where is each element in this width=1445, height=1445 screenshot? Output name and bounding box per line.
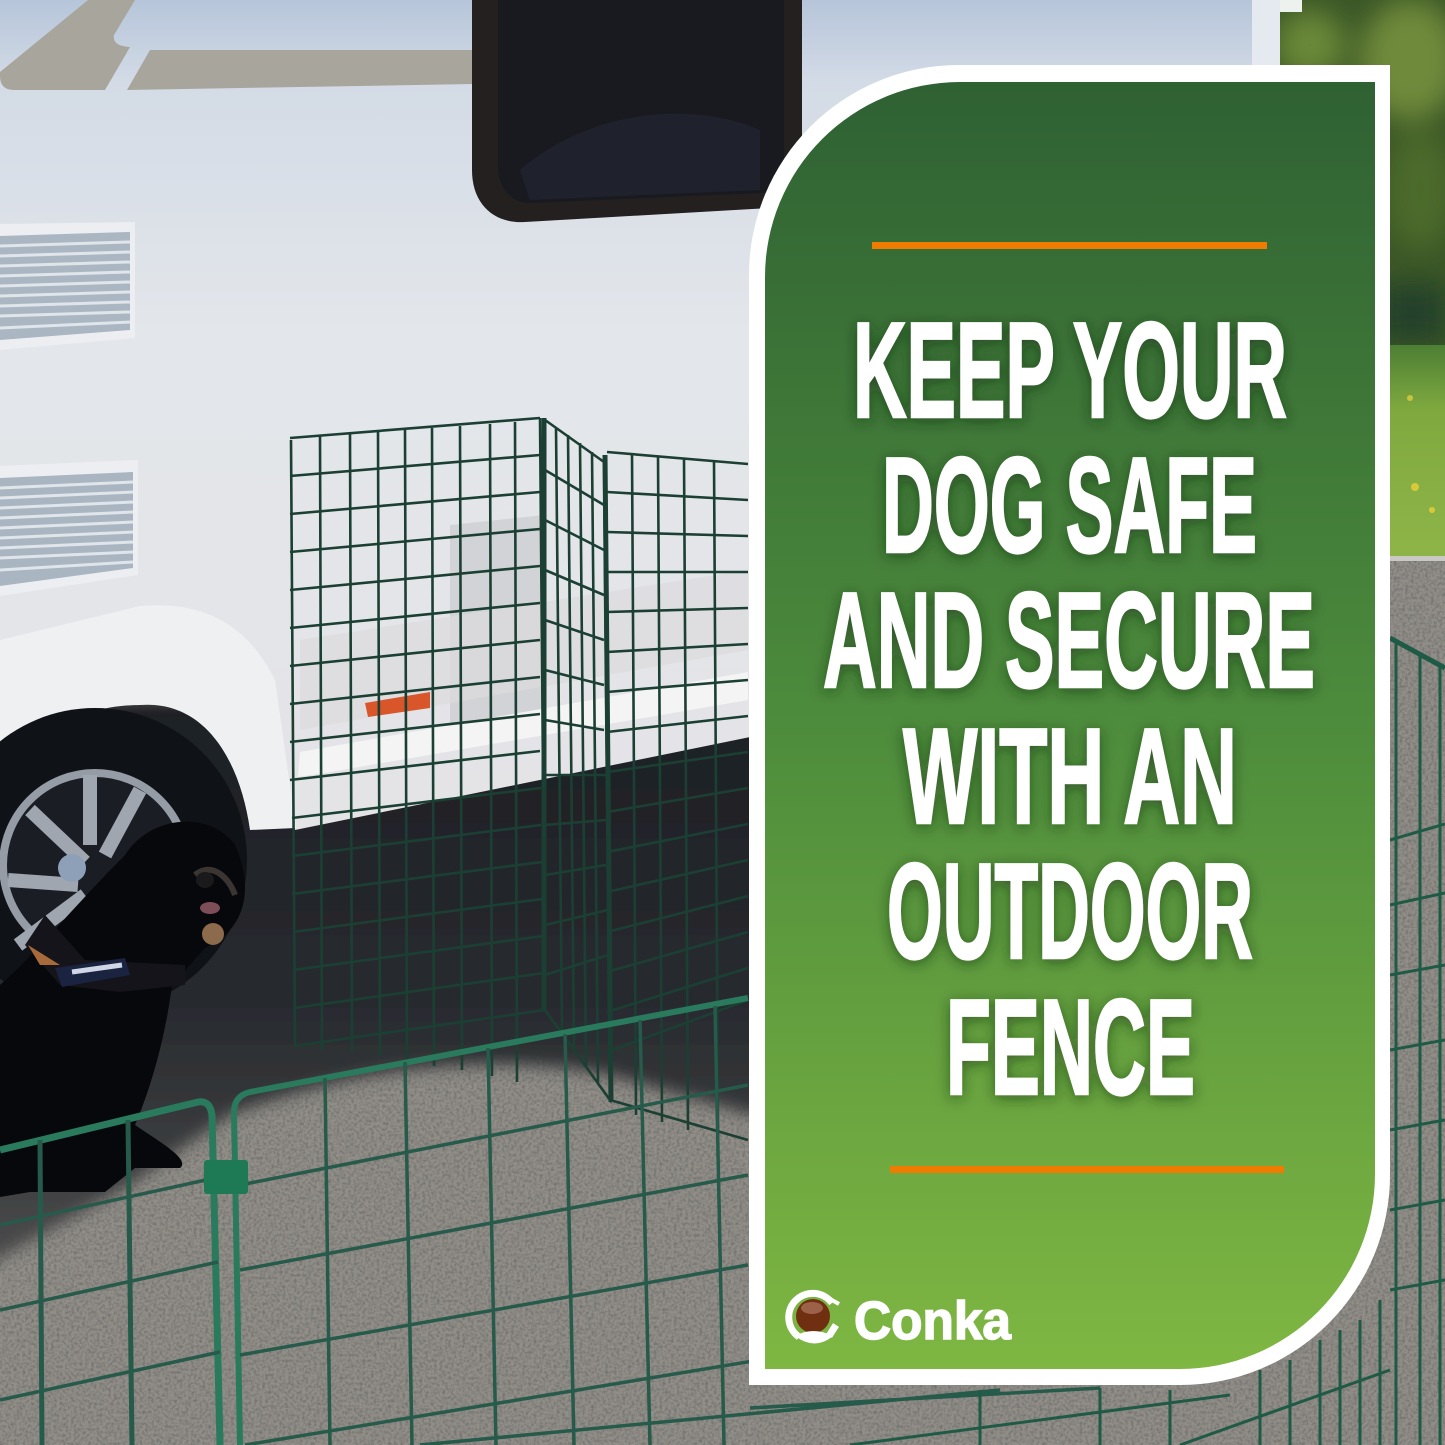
upper vent bbox=[0, 222, 135, 350]
gravel ground bbox=[0, 556, 1445, 1445]
bottom orange rule bbox=[890, 1166, 1284, 1173]
trees behind the van bbox=[1270, 0, 1445, 350]
logo wordmark: Conka bbox=[854, 1291, 1012, 1351]
lower vent bbox=[0, 460, 138, 596]
wheel bbox=[0, 708, 247, 1012]
van door panel shading bbox=[450, 515, 545, 745]
logo: Conka bbox=[789, 1291, 1012, 1351]
dog bbox=[0, 822, 245, 1197]
card green fill bbox=[765, 82, 1375, 1369]
wheel arch bbox=[0, 605, 296, 830]
logo icon bbox=[789, 1293, 839, 1344]
top orange rule bbox=[872, 242, 1267, 249]
left front fence section bbox=[0, 1102, 220, 1445]
card white border bbox=[749, 65, 1390, 1385]
front fence bbox=[0, 998, 1100, 1445]
van side stripes bbox=[0, 0, 472, 90]
headline: FENCE bbox=[946, 971, 1195, 1123]
panel: green headline card bbox=[749, 65, 1390, 1385]
grass bbox=[1380, 345, 1445, 562]
orange reflector bbox=[365, 692, 430, 717]
back fence panels bbox=[290, 418, 748, 1140]
van sill strip bbox=[298, 672, 748, 777]
shadow under the van bbox=[0, 700, 770, 1275]
right front fence section bbox=[234, 998, 1100, 1445]
dog harness bbox=[25, 915, 185, 992]
van window bbox=[472, 0, 802, 222]
van body bbox=[0, 0, 1280, 830]
right side fence bbox=[850, 638, 1445, 1445]
headline bbox=[823, 294, 1315, 1123]
fence clip bbox=[204, 1160, 248, 1194]
